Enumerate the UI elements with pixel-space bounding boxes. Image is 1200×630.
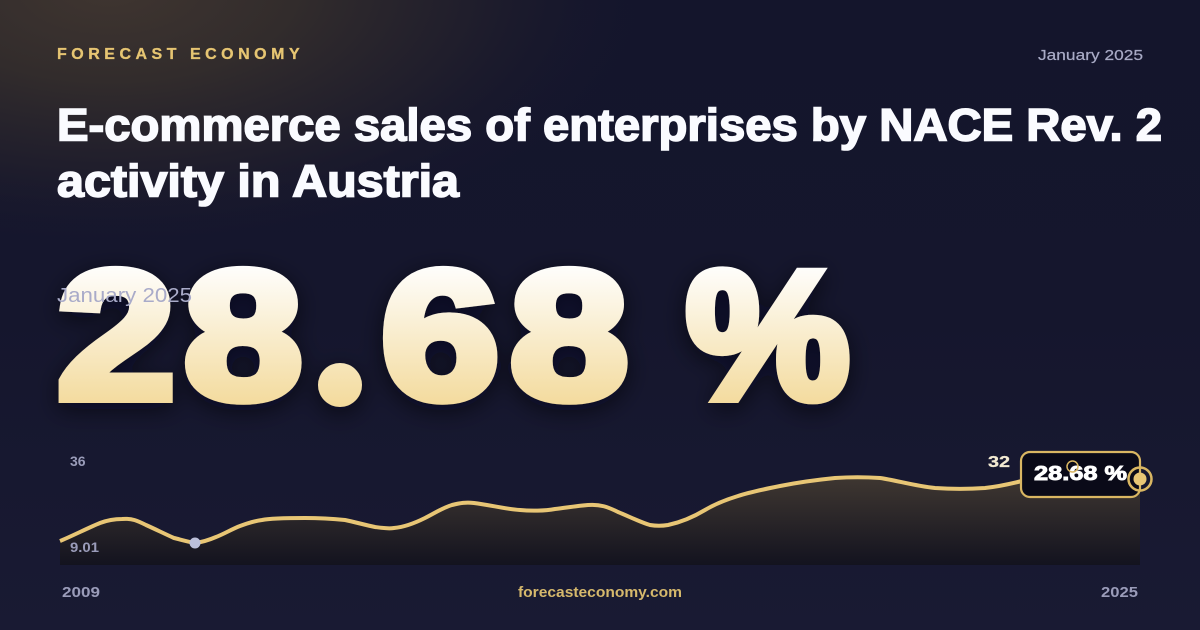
big value: 6 (381, 233, 499, 437)
title: activity in Austria (57, 156, 460, 206)
big value: 8 (510, 233, 628, 437)
website: forecasteconomy.com (518, 584, 682, 601)
peak label: 32 (988, 454, 1010, 471)
chart area (60, 477, 1140, 565)
line chart (60, 477, 1140, 565)
big value: . (324, 303, 357, 414)
big value: 2 (57, 233, 175, 437)
date overlay on value: January 2025 (57, 285, 192, 307)
chart line (60, 477, 1022, 543)
min marker (190, 538, 200, 548)
date top right: January 2025 (1038, 47, 1143, 64)
brand label: FORECAST ECONOMY (57, 46, 304, 63)
title: E-commerce sales of enterprises by NACE Rev. 2 (57, 100, 1162, 150)
big value (57, 233, 849, 437)
start year: 2009 (62, 584, 100, 601)
tooltip small ring (1067, 461, 1078, 472)
end marker (1128, 468, 1152, 490)
tooltip (1021, 452, 1140, 497)
end year: 2025 (1101, 584, 1138, 601)
tooltip: 28.68 % (1034, 463, 1127, 485)
title (57, 100, 1162, 206)
big value: % (686, 233, 849, 437)
axis min label: 9.01 (70, 539, 99, 555)
big value: 8 (184, 233, 302, 437)
axis max label: 36 (70, 453, 86, 469)
